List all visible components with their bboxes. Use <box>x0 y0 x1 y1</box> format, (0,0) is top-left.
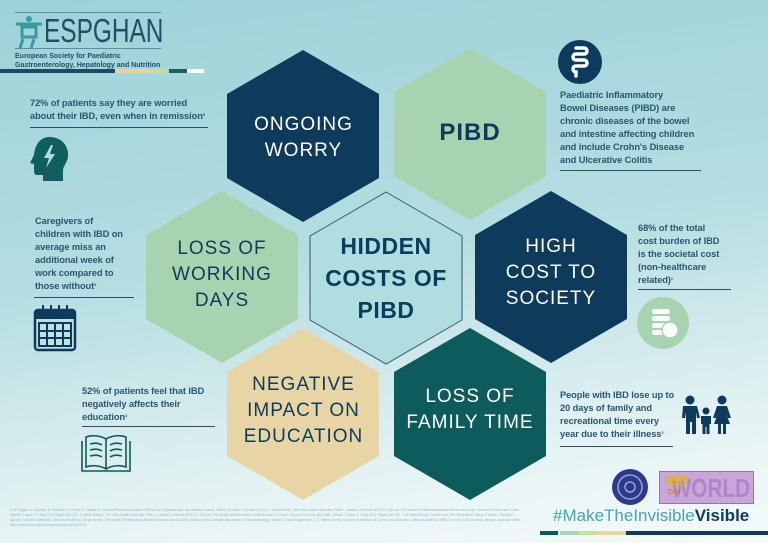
logo: round badge <box>612 469 648 505</box>
label: hidden costs: HIDDEN <box>340 233 432 259</box>
label: ongoing worry <box>254 114 353 161</box>
icon: intestine <box>558 40 602 84</box>
label: ongoing worry: ONGOING <box>254 114 353 135</box>
hex: education <box>227 328 379 500</box>
icon: family <box>682 396 731 434</box>
label: PIBD: PIBD <box>439 119 501 146</box>
label: high cost to society: SOCIETY <box>506 288 596 309</box>
logo: ESPGHAN <box>0 12 204 73</box>
label: family time: FAMILY TIME <box>406 412 534 433</box>
text: societal cost stat: 68% of the total cost burden of IBD is the societal cost (non-healthcare related)1 <box>638 223 719 285</box>
references footnote: 1. M Ruggeri, A. Cicchetti, G. Iannazzo, T.H. Roth, S. Danese. A. Prevalent Economic burden of IBD: A cost. Digestive and Liver Disease Journal, Volume 50, Issue 3, 23 March 2018. 2. Johan Burisch, Tine Jess, Matteo Martinato, Peter L. Lakatos, on behalf of ECCO -EpiCom. The burden of inflammatory bowel disease in Europe, Journal of Crohn's and Colitis, Volume 7, Issue 4, 1 May 2013, Pages 322–337. 3. Johan Burisch, Tine Jess, Matteo Martinato, Peter L. Lakatos, on behalf of ECCO -EpiCom. The burden of inflammatory bowel disease in Europe. Journal of Crohn's and Colitis. Volume 7, Issue 4, 1 May 2013. Pages 322–337. 4. M Ellen Kuenzig. Jennifer Lee, Eric I Benchimol, Gilaad G Kaplan, Geoffrey C Nguyen, Claudia N Bernstein, Nicholas Kim Bitton, Sanjay Murthy. The Impact of Inflammatory Bowel Disease in Canada 2018. Journal of the Canadian Association of Gastroenterology. Volume 2, Issue Supplement_1. 5. Patient survey, European Federation of Crohn's and Ulcerative Colitis Associations. IMPACT survey 2018. Brussels, Belgium. Available online: https://www.efcca.org/en/projects/impact-survey-2018. <box>10 508 521 527</box>
icon: head <box>30 137 68 181</box>
icon: logo figure <box>16 16 42 48</box>
logo: ESPGHAN: ESPGHAN <box>44 12 163 49</box>
logo: ESPGHAN: Gastroenterology, Hepatology and Nutrition <box>15 62 160 69</box>
label: high cost to society <box>506 236 596 309</box>
text: education stat: 52% of patients feel that IBD negatively affects their education3 <box>82 386 204 422</box>
label: family time: LOSS OF <box>425 386 515 407</box>
text: PIBD definition: and intestine affecting children <box>560 129 694 139</box>
label: education: IMPACT ON <box>247 400 360 421</box>
label: loss of working days: LOSS OF <box>177 238 267 259</box>
logo: World IBD Day: DAY <box>668 489 682 496</box>
hex: high cost to society <box>475 191 627 363</box>
label: hidden costs: COSTS OF <box>325 265 447 291</box>
label: family time <box>406 386 534 433</box>
hex: loss of working days <box>146 191 298 363</box>
label: high cost to society: HIGH <box>525 236 577 257</box>
text: PIBD definition: chronic diseases of the bowel <box>560 116 689 126</box>
label: education: NEGATIVE <box>252 374 355 395</box>
text: PIBD definition: and Ulcerative Colitis <box>560 155 652 165</box>
label: hidden costs: PIBD <box>358 297 414 323</box>
text: PIBD definition <box>560 90 694 165</box>
text: PIBD definition: Paediatric Inflammatory <box>560 90 663 100</box>
text: caregivers stat: Caregivers of children with IBD on average miss an additional week of work compared to those without4 <box>35 216 123 291</box>
logo: World IBD Day: IBD <box>666 473 688 488</box>
label: education <box>244 374 363 447</box>
label: high cost to society: COST TO <box>506 262 596 283</box>
logo: World IBD Day: WORLD <box>671 473 750 503</box>
colour bar <box>540 531 768 535</box>
label: loss of working days: DAYS <box>195 290 249 311</box>
text: worry stat: 72% of patients say they are worried about their IBD, even when in remission5 <box>30 98 205 121</box>
label: hidden costs <box>325 233 447 323</box>
text: PIBD definition: Bowel Diseases (PIBD) are <box>560 103 675 113</box>
text: PIBD definition: and include Crohn's Disease <box>560 142 684 152</box>
label: loss of working days <box>172 238 272 311</box>
hex: ongoing worry <box>227 50 379 222</box>
hex: PIBD <box>394 48 546 220</box>
label: loss of working days: WORKING <box>172 264 272 285</box>
text: family time stat: People with IBD lose up to 20 days of family and recreational time every year due to their illness2 <box>560 390 674 439</box>
hex: family time <box>394 328 546 500</box>
logo: ESPGHAN: European Society for Paediatric <box>15 53 121 60</box>
hashtag: #MakeTheInvisibleVisible <box>553 506 749 525</box>
label: ongoing worry: WORRY <box>265 140 342 161</box>
icon: coins <box>637 297 689 349</box>
label: education: EDUCATION <box>244 426 363 447</box>
icon: calendar <box>34 305 76 352</box>
icon: book <box>81 434 131 472</box>
hex: hidden costs <box>310 192 462 364</box>
